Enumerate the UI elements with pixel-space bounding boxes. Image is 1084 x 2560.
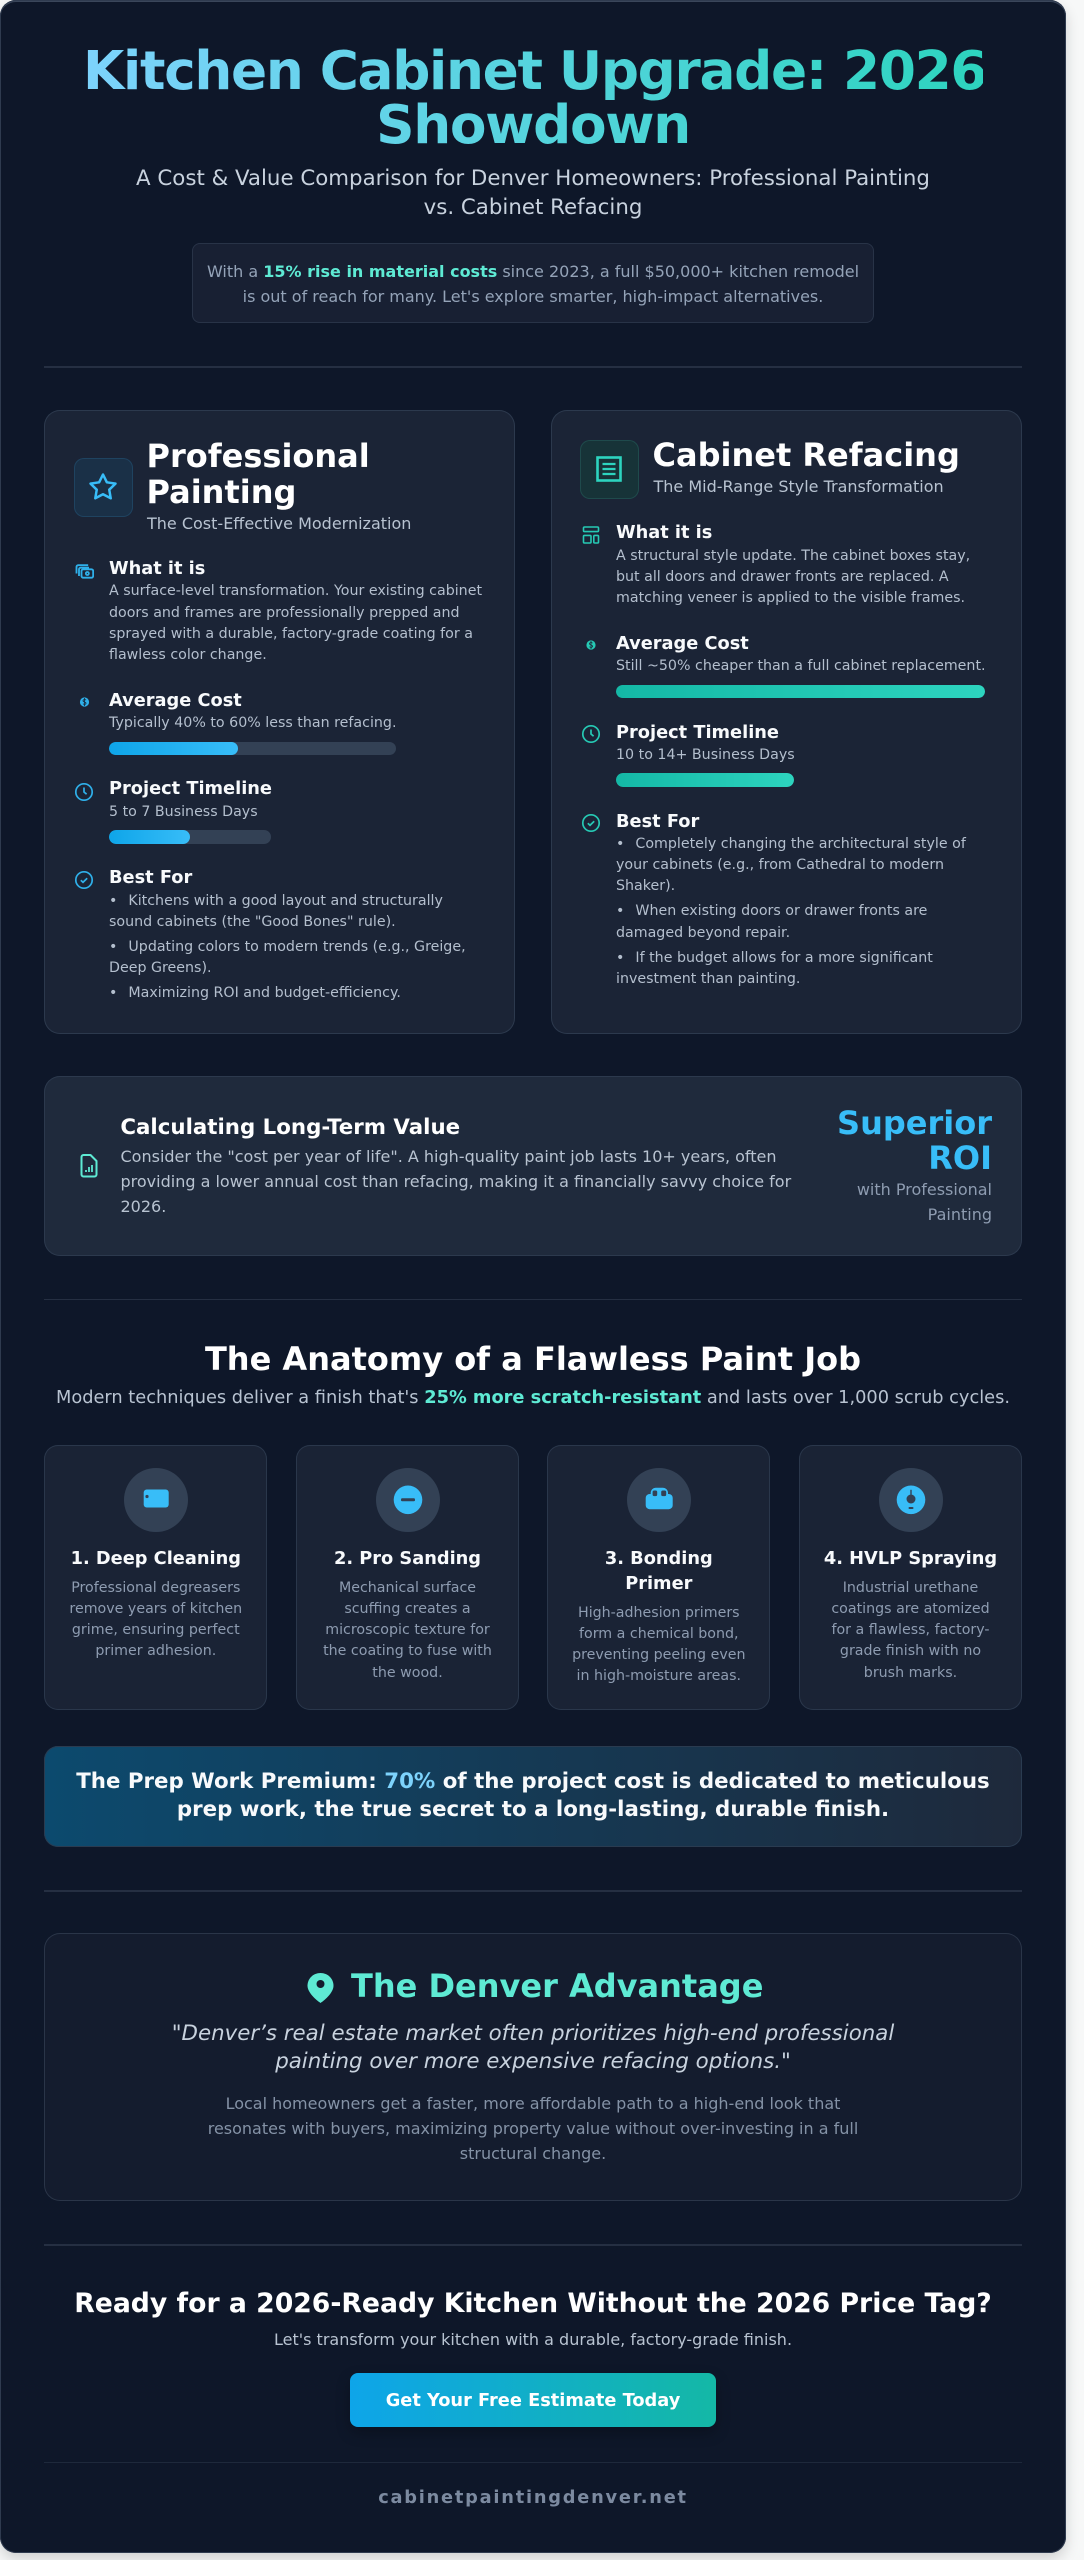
item title: What it is: [109, 558, 205, 579]
bullet list: • Maximizing ROI and budget-efficiency.: [109, 985, 401, 1001]
item text: but all doors and drawer fronts are replaced. A: [616, 569, 949, 585]
icon: clock: [582, 725, 600, 743]
intro text: is out of reach for many. Let's explore smarter, high-impact alternatives.: [243, 286, 823, 306]
call to action text: Let's transform your kitchen with a durable, factory-grade finish.: [274, 2330, 792, 2349]
item text: flawless color change.: [109, 647, 267, 663]
item text: 10 to 14+ Business Days: [616, 747, 795, 763]
denver text: resonates with buyers, maximizing property value without over-investing in a full: [208, 2119, 858, 2138]
stat caption: Painting: [928, 1205, 992, 1224]
button: Get Your Free Estimate Today: [386, 2390, 680, 2411]
icon: check: [74, 871, 93, 889]
item text: A surface-level transformation. Your existing cabinet: [109, 583, 482, 599]
item: average cost: [586, 633, 986, 698]
heading: [146, 436, 370, 511]
step title: 4. HVLP Spraying: [824, 1548, 997, 1569]
item title: Average Cost: [109, 690, 242, 711]
banner text: [76, 1768, 990, 1822]
icon: dollar: [80, 697, 90, 707]
subtitle: [136, 166, 930, 220]
icon: spraying: [878, 1468, 942, 1532]
item: average cost: [80, 690, 396, 755]
prep work banner: [44, 1746, 1022, 1847]
title: Kitchen Cabinet Upgrade: 2026: [83, 39, 986, 102]
intro callout: [192, 243, 874, 323]
heading: Professional: [146, 436, 370, 474]
call to action heading: Ready for a 2026-Ready Kitchen Without the 2026 Price Tag?: [74, 2288, 992, 2319]
step title: [605, 1548, 713, 1594]
step text: grade finish with no: [840, 1643, 981, 1659]
bullet list: Deep Greens).: [109, 960, 212, 976]
bullet list: • Kitchens with a good layout and structurally: [109, 893, 443, 909]
step title: 3. Bonding: [605, 1548, 713, 1569]
bullet list: damaged beyond repair.: [616, 925, 790, 941]
title: [83, 44, 983, 151]
icon: dollar: [586, 640, 596, 650]
step text: Mechanical surface: [339, 1580, 476, 1596]
item title: What it is: [616, 522, 712, 543]
step text: [323, 1580, 492, 1681]
icon: document: [580, 440, 638, 498]
intro text: With a 15% rise in material costs since 2023, a full $50,000+ kitchen remodel: [207, 262, 859, 280]
step text: remove years of kitchen: [69, 1601, 242, 1617]
banner text: prep work, the true secret to a long-lasting, durable finish.: [177, 1797, 889, 1822]
step text: primer adhesion.: [95, 1643, 216, 1659]
value text: Consider the "cost per year of life". A high-quality paint job lasts 10+ years, often: [120, 1147, 777, 1166]
button: [350, 2373, 716, 2427]
bullet list: your cabinets (e.g., from Cathedral to modern: [616, 857, 944, 873]
stat caption: [857, 1180, 992, 1224]
denver heading: The Denver Advantage: [351, 1967, 763, 2005]
bullet list: [616, 836, 966, 987]
step text: grime, ensuring perfect: [72, 1622, 240, 1638]
step text: coatings are atomized: [831, 1601, 990, 1617]
step text: the coating to fuse with: [323, 1643, 492, 1659]
anatomy subheading: Modern techniques deliver a finish that's 25% more scratch-resistant and lasts over 1,000 scrub cycles.: [56, 1387, 1010, 1408]
step title: Primer: [625, 1573, 692, 1594]
intro text: [207, 262, 859, 306]
icon: sanding: [376, 1468, 440, 1532]
item title: Best For: [616, 811, 699, 832]
item: what it is: [76, 558, 482, 663]
icon: star: [74, 458, 132, 516]
bullet list: sound cabinets (the "Good Bones" rule).: [109, 914, 396, 930]
step 3 card: [547, 1445, 770, 1710]
step text: [572, 1604, 746, 1684]
step text: [831, 1580, 990, 1681]
icon: cleaning: [124, 1468, 188, 1532]
banner text: The Prep Work Premium: 70% of the project cost is dedicated to meticulous: [76, 1768, 990, 1794]
item text: A structural style update. The cabinet boxes stay,: [616, 548, 970, 564]
step text: in high-moisture areas.: [577, 1668, 741, 1684]
stat: superior roi: ROI: [928, 1139, 992, 1177]
bullet list: • If the budget allows for a more significant: [616, 950, 933, 966]
item: what it is: [582, 522, 970, 606]
item text: [109, 583, 482, 663]
bar: cost: [109, 742, 396, 755]
bullet list: • Updating colors to modern trends (e.g., Greige,: [109, 939, 466, 955]
heading: Cabinet Refacing: [652, 436, 960, 474]
item title: Average Cost: [616, 633, 749, 654]
value heading: Calculating Long-Term Value: [120, 1115, 460, 1140]
step text: Industrial urethane: [843, 1580, 978, 1596]
subheading: The Cost-Effective Modernization: [147, 514, 411, 532]
step text: for a flawless, factory-: [831, 1622, 990, 1638]
bullet list: [109, 893, 466, 1001]
step 1 card: [44, 1445, 267, 1710]
step text: Professional degreasers: [71, 1580, 240, 1596]
item text: doors and frames are professionally prepped and: [109, 605, 460, 621]
item: project timeline: [74, 778, 272, 844]
title: Showdown: [376, 93, 690, 156]
item text: 5 to 7 Business Days: [109, 804, 258, 820]
bullet list: Shaker).: [616, 878, 675, 894]
bar: timeline: [616, 773, 794, 787]
item text: [616, 548, 970, 606]
heading: Painting: [146, 473, 296, 511]
denver text: structural change.: [460, 2144, 606, 2163]
subtitle: A Cost & Value Comparison for Denver Homeowners: Professional Painting: [136, 166, 930, 191]
step text: form a chemical bond,: [579, 1626, 739, 1642]
item title: Best For: [109, 867, 192, 888]
item: project timeline: [582, 722, 795, 787]
step text: preventing peeling even: [572, 1647, 746, 1663]
icon: layout: [582, 526, 600, 544]
bullet list: investment than painting.: [616, 971, 800, 987]
item text: Still ~50% cheaper than a full cabinet replacement.: [616, 658, 986, 674]
step text: the wood.: [372, 1665, 443, 1681]
value text: providing a lower annual cost than refacing, making it a financially savvy choice for: [120, 1172, 791, 1191]
item text: matching veneer is applied to the visible frames.: [616, 590, 965, 606]
step title: 2. Pro Sanding: [334, 1548, 481, 1569]
bar: cost: [616, 685, 985, 698]
quote: [172, 2021, 894, 2074]
denver text: Local homeowners get a faster, more affordable path to a high-end look that: [226, 2094, 840, 2113]
bullet list: • Completely changing the architectural style of: [616, 836, 966, 852]
step text: microscopic texture for: [325, 1622, 490, 1638]
quote: painting over more expensive refacing options.": [275, 2049, 791, 2074]
step text: brush marks.: [864, 1665, 957, 1681]
icon: file chart: [80, 1154, 98, 1178]
quote: "Denver’s real estate market often prioritizes high-end professional: [172, 2021, 894, 2046]
value text: [120, 1147, 792, 1216]
icon: money: [76, 564, 94, 579]
icon: map pin: [308, 1973, 334, 2003]
stat: superior roi: [837, 1104, 992, 1177]
item text: Typically 40% to 60% less than refacing.: [109, 715, 396, 731]
bar: timeline: [109, 830, 271, 844]
item: best for: [582, 811, 966, 987]
value text: 2026.: [120, 1197, 166, 1216]
icon: primer: [627, 1468, 691, 1532]
item title: Project Timeline: [616, 722, 779, 743]
bullet list: • When existing doors or drawer fronts are: [616, 903, 927, 919]
step 4 card: [799, 1445, 1022, 1710]
stat: superior roi: Superior: [837, 1104, 992, 1142]
item: best for: [74, 867, 466, 1001]
step title: 1. Deep Cleaning: [71, 1548, 241, 1569]
subtitle: vs. Cabinet Refacing: [424, 195, 642, 220]
panel: denver advantage: [44, 1933, 1022, 2201]
step text: scuffing creates a: [344, 1601, 471, 1617]
panel: professional painting: [44, 410, 515, 1034]
denver text: [208, 2094, 858, 2163]
anatomy heading: The Anatomy of a Flawless Paint Job: [205, 1340, 861, 1378]
footer website: cabinetpaintingdenver.net: [378, 2487, 688, 2508]
subheading: The Mid-Range Style Transformation: [654, 477, 944, 496]
panel: long-term value: [44, 1076, 1022, 1256]
panel: cabinet refacing: [551, 410, 1022, 1034]
icon: check: [582, 814, 600, 832]
item text: sprayed with a durable, factory-grade coating for a: [109, 626, 473, 642]
item title: Project Timeline: [109, 778, 272, 799]
stat caption: with Professional: [857, 1180, 992, 1199]
step 2 card: [296, 1445, 519, 1710]
step text: High-adhesion primers: [578, 1604, 740, 1620]
icon: clock: [74, 783, 93, 801]
step text: [69, 1580, 242, 1659]
